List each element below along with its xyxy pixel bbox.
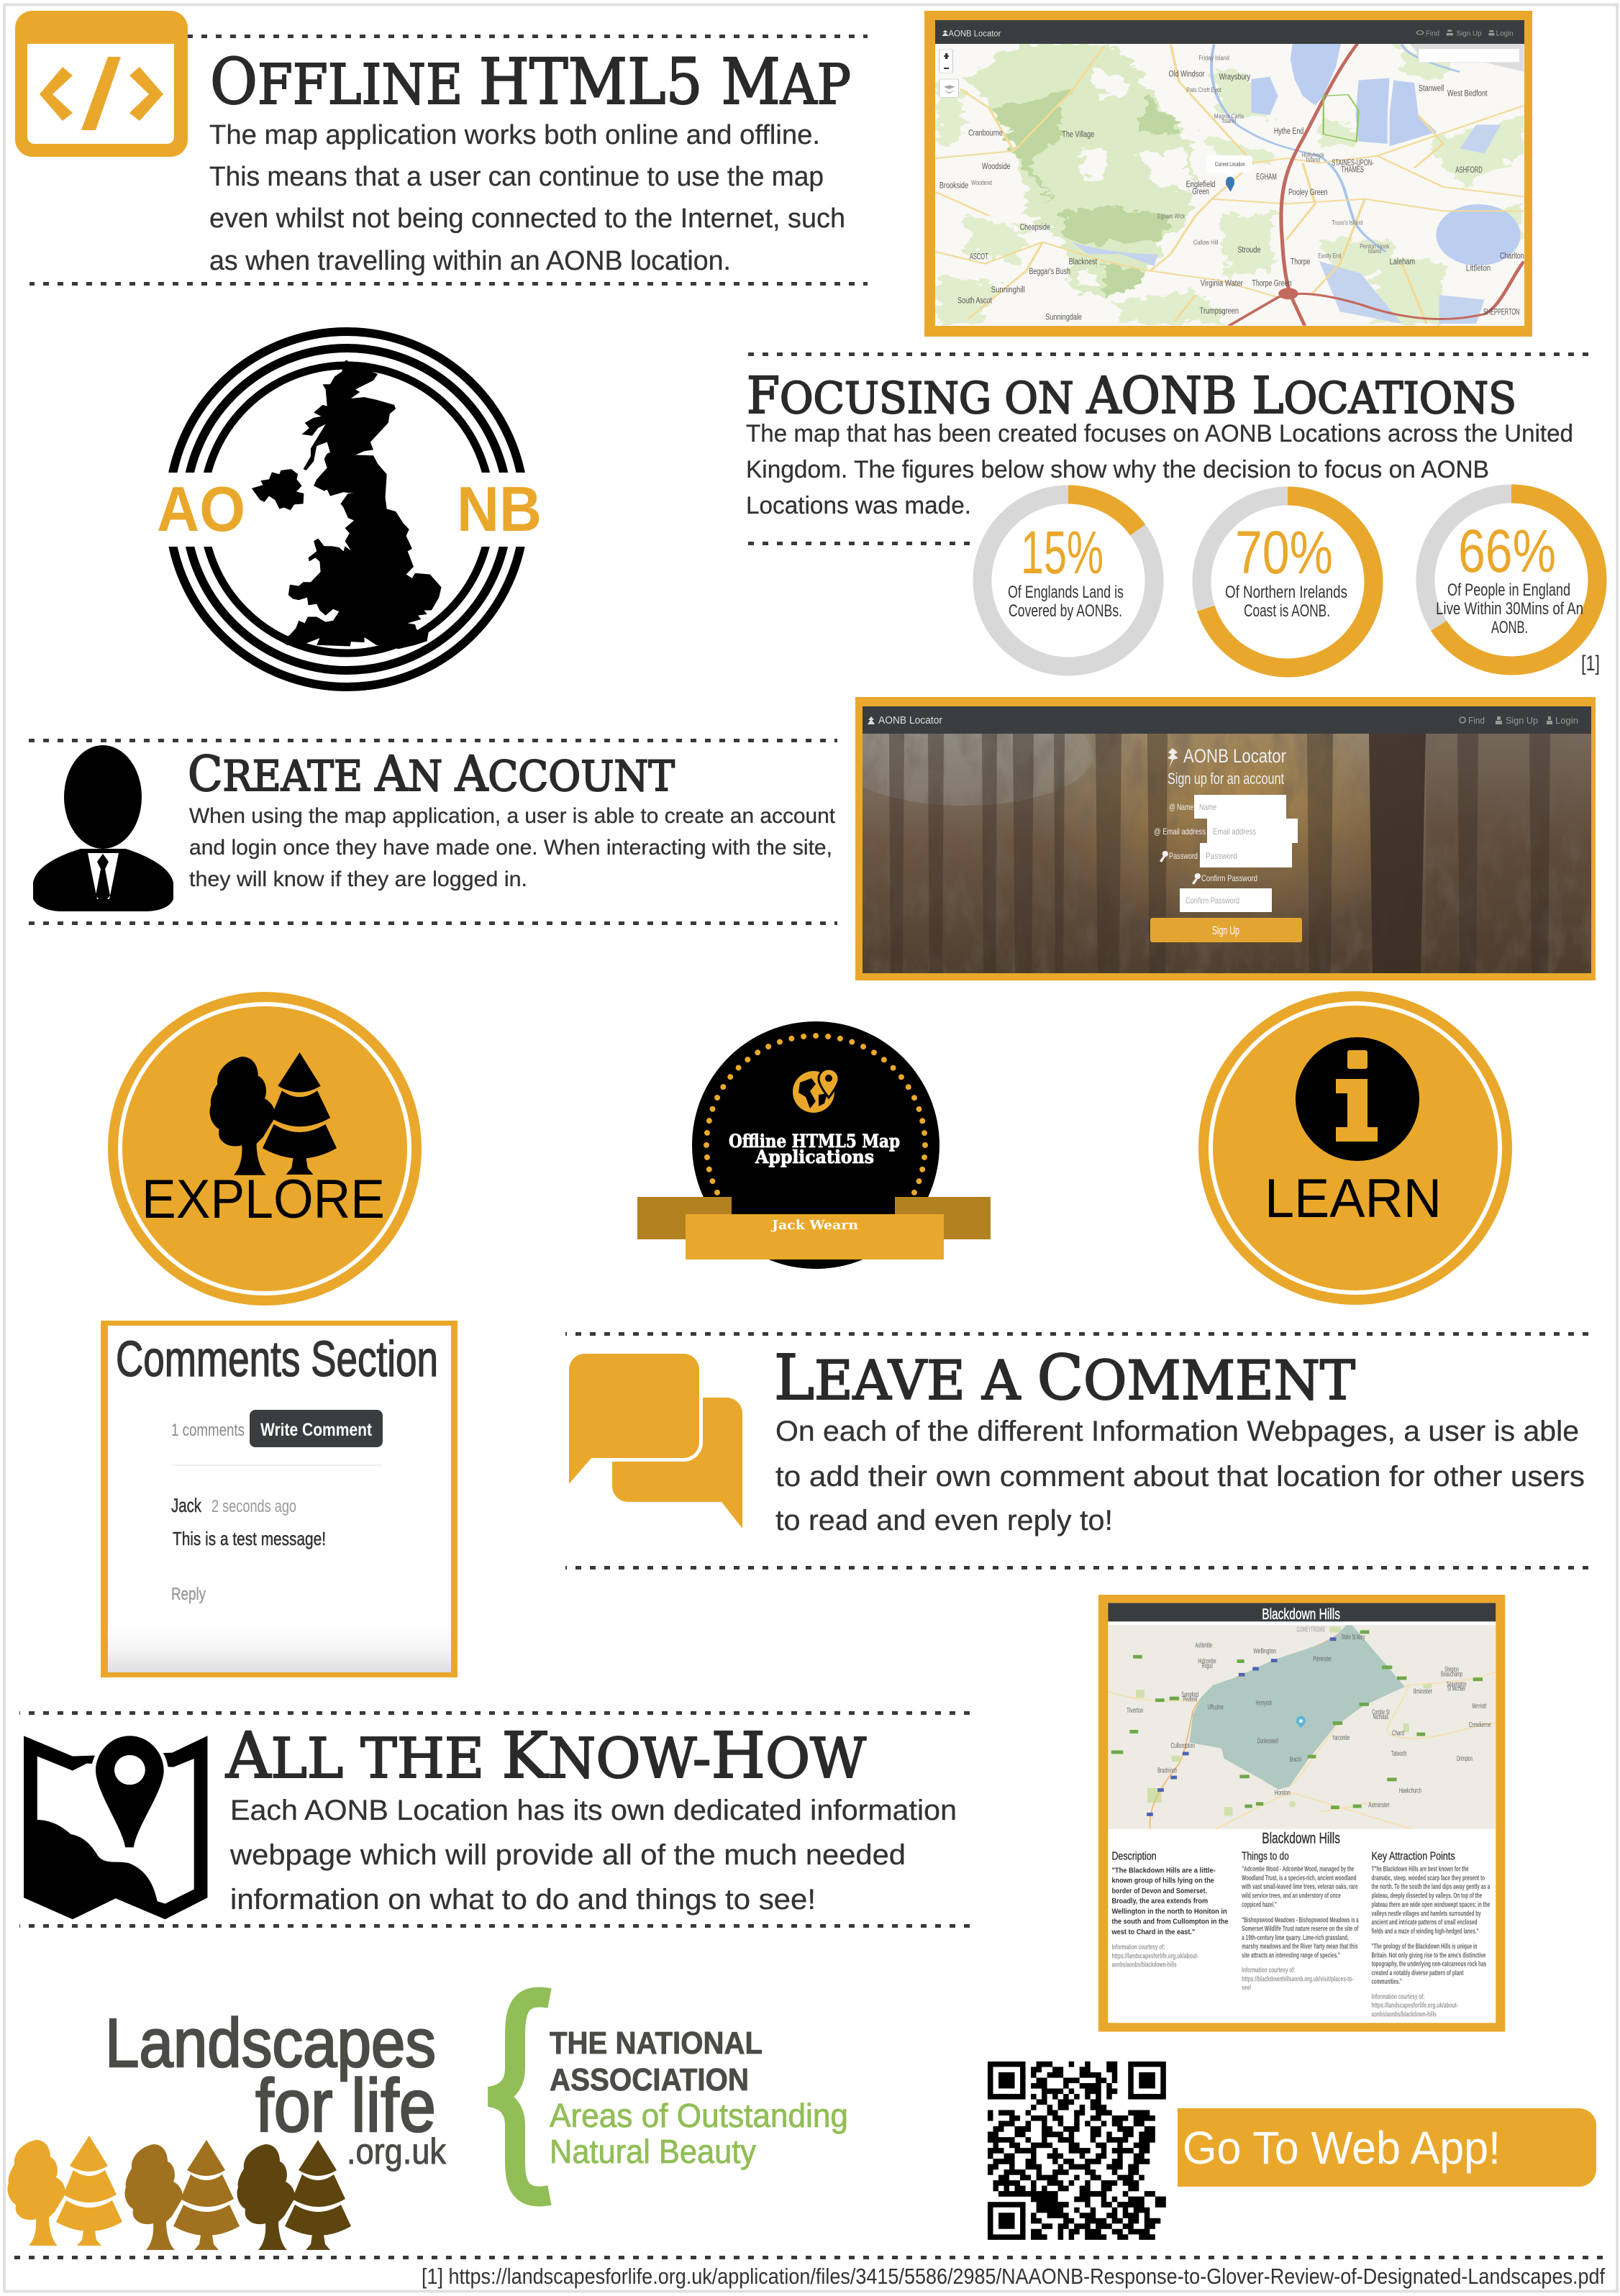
place names: Magna Carta [1214, 112, 1244, 119]
text: offline description: even whilst not being connected to the Internet, such [209, 204, 845, 234]
logo: National Association AONB: Natural Beauty [550, 2133, 756, 2170]
logo: National Association AONB: Areas of Outstanding [550, 2097, 848, 2134]
column: key attraction points: aonbs/aonbs/blackdown-hills [1371, 2010, 1437, 2018]
column: description: border of Devon and Somerset. [1111, 1887, 1207, 1895]
badge: Explore [108, 992, 422, 1306]
text: know-how description [229, 1795, 957, 1915]
map place names: Drimpton [1457, 1755, 1473, 1763]
navbar labels: Login [1496, 29, 1514, 37]
text: focus description: Kingdom. The figures below show why the decision to focus on AONB [746, 456, 1489, 483]
map place names: Bradninch [1157, 1767, 1177, 1775]
column: description: known group of hills lying on the [1111, 1877, 1214, 1885]
screenshot: comments section: Comments Section [116, 1331, 438, 1387]
text: comment description: to add their own comment about that location for other users [775, 1461, 1585, 1493]
icon: map with pin [24, 1736, 207, 1919]
column: key attraction points: Key Attraction Points [1371, 1851, 1455, 1863]
donut: 15% [983, 495, 1154, 666]
map place names: Ilminster [1414, 1688, 1433, 1696]
place names: Woodend [971, 178, 992, 186]
map place names: Hemyock [1256, 1700, 1272, 1708]
place names: West Bedfont [1447, 88, 1488, 98]
place names: Wraysbury [1219, 72, 1250, 81]
section: Focusing on AONB Locations [746, 352, 1600, 675]
column: description: aonbs/aonbs/blackdown-hills [1111, 1962, 1177, 1969]
map place names: Tiverton [1127, 1707, 1143, 1715]
logo: Landscapes for Life [7, 2005, 447, 2250]
column: key attraction points: Information courtesy of: [1371, 1993, 1424, 2001]
badge: Offline HTML5 Map Applications: Jack Wearn [770, 1218, 858, 1233]
badge: Offline HTML5 Map Applications [637, 1021, 991, 1269]
text: focus description [746, 420, 1573, 519]
infographic page: SHEPPERTON [1483, 307, 1519, 316]
text: offline description: This means that a user can continue to use the map [209, 162, 824, 192]
text: account description: When using the map application, a user is able to create an account [189, 804, 836, 828]
place names: Stroude [1237, 245, 1260, 255]
column: things to do: wild service trees, and an understory of once [1242, 1892, 1341, 1900]
location pin and popup [1207, 155, 1252, 192]
badge: Offline HTML5 Map Applications: Applications [755, 1147, 874, 1167]
place names: Trumpsgreen [1200, 306, 1239, 316]
sign up form: Email address [1213, 826, 1256, 837]
map place names: Rogus [1202, 1662, 1213, 1670]
heading: Offline HTML5 Map: OFFLINE HTML5 MAP [210, 45, 851, 119]
column: things to do: see/ [1242, 1984, 1251, 1992]
screenshot: comments section: Reply [171, 1585, 206, 1604]
section: Create An Account [26, 739, 837, 925]
search box [1419, 49, 1519, 63]
place names: Blacknest [1069, 257, 1097, 266]
donut: 70% [1201, 496, 1374, 668]
zoom controls [939, 49, 958, 97]
sign up form: Name [1199, 802, 1216, 812]
text: know-how description: webpage which will provide all of the much needed [229, 1839, 906, 1871]
ribbon front [686, 1214, 944, 1259]
navbar labels: AONB Locator [949, 29, 1001, 39]
place names: Island [1222, 117, 1236, 124]
donut: 66% [1426, 493, 1597, 666]
map place names: Seavington [1447, 1680, 1467, 1689]
place names: Island [1306, 155, 1320, 163]
place names: Virginia Water [1201, 278, 1243, 288]
text: offline description [209, 120, 845, 276]
place names: Stanwell [1419, 83, 1444, 93]
column: key attraction points: created a notably diverse pattern of plant [1371, 1969, 1464, 1977]
sign up form: Sign up for an account [1168, 770, 1284, 788]
column: things to do: site attracts an interesting range of species." [1242, 1951, 1340, 1959]
place names: ASCOT [970, 252, 988, 261]
map place names: Combe St [1372, 1709, 1390, 1717]
map place names: St Michael [1447, 1685, 1465, 1693]
icon: globe with pin [793, 1069, 839, 1113]
icon: speech bubbles [569, 1354, 742, 1529]
text: comment description: On each of the different Information Webpages, a user is able [775, 1416, 1579, 1447]
column: description: https://landscapesforlife.org.uk/about- [1111, 1952, 1198, 1961]
column: things to do: a 19th-century lime quarry. Lime-rich grassland, [1242, 1934, 1349, 1942]
place names [939, 54, 1524, 322]
navbar labels: Sign Up [1506, 715, 1538, 726]
map place names: Stoke St Mary [1342, 1634, 1365, 1641]
screenshot: Blackdown Hills information page: Blackdown Hills [1262, 1606, 1340, 1623]
place names: Egham Wick [1157, 212, 1186, 219]
text: focus description: The map that has been created focuses on AONB Locations across the United [746, 420, 1573, 447]
column: description: Information courtesy of: [1111, 1944, 1165, 1951]
place names: EGHAM [1256, 172, 1277, 181]
button: Go To Web App: Go To Web App! [1183, 2122, 1501, 2174]
place names: STAINES-UPON- [1332, 158, 1374, 168]
screenshot: comments section: 2 seconds ago [211, 1497, 296, 1516]
button: Go To Web App [1178, 2108, 1596, 2187]
donut: 66%: Live Within 30Mins of An [1436, 599, 1583, 619]
logo: Landscapes for Life: Landscapes [105, 2005, 436, 2082]
place names: The Village [1062, 129, 1094, 139]
place names: Island [1368, 247, 1381, 255]
sign up form: @ Email address [1154, 826, 1206, 837]
logo: National Association AONB [489, 1997, 848, 2197]
column: description: Wellington in the north to Honiton in [1111, 1908, 1227, 1915]
forest photo background [863, 734, 1591, 973]
column: key attraction points: ancient and intricate patterns of small enclosed [1371, 1918, 1478, 1927]
button: write comment: Write Comment [260, 1420, 373, 1440]
icon: row of trees [7, 2136, 351, 2250]
map place names: COMEYTROWE [1296, 1626, 1325, 1634]
sign up form: Confirm Password [1186, 896, 1239, 906]
donut: 15%: Covered by AONBs. [1009, 601, 1122, 621]
map place names: Chard [1392, 1730, 1404, 1738]
map place names: Yarcombe [1332, 1734, 1350, 1742]
place names: Thorpe Green [1252, 278, 1292, 288]
sign up form: Confirm Password [1201, 873, 1257, 883]
screenshot: comments section [101, 1321, 458, 1677]
logo: National Association AONB: ASSOCIATION [550, 2062, 749, 2097]
column: key attraction points [1371, 1851, 1491, 2018]
place names: Brookside [939, 181, 968, 190]
icon: trees [210, 1052, 337, 1175]
column: key attraction points: topography, the underlying non-calcareous rock has [1371, 1960, 1486, 1969]
text: offline description: The map application works both online and offline. [209, 120, 820, 150]
map place names: Holcombe [1198, 1658, 1216, 1666]
column: things to do: Information courtesy of: [1242, 1967, 1296, 1974]
logo: AONB UK map: NB [457, 473, 542, 545]
map place names: Dunkeswell [1257, 1738, 1278, 1746]
logo: Landscapes for Life: for life [255, 2064, 436, 2148]
column: key attraction points: dramatic, steep, wooded scarp face they present to [1371, 1874, 1485, 1882]
place names: Cheapside [1020, 222, 1050, 232]
screenshot: comments section: Jack [171, 1495, 201, 1516]
icon: person in suit [33, 745, 173, 911]
icon: green brace [489, 1997, 550, 2197]
map place names [1127, 1626, 1491, 1810]
logo: National Association AONB: THE NATIONAL [550, 2026, 763, 2061]
place names: Laleham [1390, 257, 1415, 266]
citation marker: [1] [1581, 652, 1600, 675]
sign up form: AONB Locator [1183, 745, 1286, 767]
heading: Create An Account: CREATE AN ACCOUNT [188, 746, 675, 802]
map place names: Merriott [1472, 1703, 1486, 1710]
map place names: Axminster [1368, 1802, 1390, 1810]
logo: AONB UK map: AO [157, 473, 245, 545]
map place names: Hawkchurch [1399, 1787, 1421, 1795]
map place names: Sampford [1181, 1691, 1198, 1699]
logo: Landscapes for Life: .org.uk [347, 2131, 447, 2172]
screenshot: map application: Charlton [1500, 251, 1524, 260]
place names: Pats Croft Eyot [1186, 86, 1221, 94]
column: things to do: "Adcombe Wood - Adcombe Wood, managed by the [1242, 1866, 1355, 1874]
column: description: west to Chard in the east." [1111, 1928, 1196, 1936]
donut: 15%: 15% [1021, 519, 1103, 586]
column: key attraction points: https://landscapesforlife.org.uk/about- [1371, 2002, 1458, 2010]
text: account description: and login once they have made one. When interacting with the site, [189, 836, 832, 860]
sign up form: @ Name [1169, 802, 1193, 812]
map place names: Peverell [1183, 1695, 1197, 1703]
place names: Friday Island [1198, 54, 1229, 61]
ribbon back [637, 1197, 991, 1239]
donut: 15%: Of Englands Land is [1008, 583, 1124, 602]
sign up form: Password [1169, 851, 1198, 861]
place names: Thorpe [1291, 257, 1310, 266]
footer reference [6, 2256, 1611, 2289]
column: key attraction points: Britain. Not only giving rise to the area's distinctive [1371, 1951, 1486, 1959]
text: account description [189, 804, 836, 891]
badge: Explore: EXPLORE [142, 1169, 385, 1230]
place names: Penton Hook [1360, 242, 1390, 250]
column: description: Broadly, the area extends from [1111, 1898, 1208, 1905]
column: description: "The Blackdown Hills are a little- [1111, 1867, 1216, 1874]
column: key attraction points: plateau there are wide open windswept spaces; in the [1371, 1901, 1491, 1909]
place names: Truss's Island [1332, 219, 1362, 226]
text: account description: they will know if they are logged in. [189, 867, 527, 891]
column: key attraction points: "The geology of the Blackdown Hills is unique in [1371, 1943, 1478, 1951]
place names: Pooley Green [1288, 187, 1327, 197]
map place names: Beacon [1290, 1756, 1301, 1764]
icon: code window [15, 11, 188, 157]
place names: Green [1192, 186, 1209, 196]
place names: Hollyhock [1301, 151, 1324, 158]
map place names: Tatworth [1391, 1750, 1407, 1758]
badge: Learn: LEARN [1265, 1168, 1442, 1229]
navbar labels: Find [1468, 715, 1485, 726]
screenshot: sign up page [855, 697, 1596, 980]
heading: Leave a Comment: LEAVE A COMMENT [774, 1342, 1355, 1414]
donut: 70%: Coast is AONB. [1244, 601, 1330, 621]
heading: Focusing on AONB Locations: FOCUSING ON AONB LOCATIONS [747, 366, 1516, 425]
map place names: Honiton [1275, 1789, 1291, 1798]
column: key attraction points: valleys nestle villages and hamlets surrounded by [1371, 1910, 1481, 1918]
column: things to do: marshy meadows and the River Yarty mean that this [1242, 1943, 1357, 1951]
column: things to do: Things to do [1242, 1851, 1289, 1863]
place names: Callow Hill [1193, 238, 1218, 246]
screenshot: comments section: 1 comments [171, 1421, 245, 1440]
donut: 66%: AONB. [1491, 618, 1528, 637]
screenshot: Blackdown Hills information page [1098, 1595, 1505, 2032]
navbar labels [868, 714, 1578, 726]
column: things to do: https://blackdownhillsaonb.org.uk/visit/places-to- [1242, 1975, 1354, 1983]
place names: Hythe End [1274, 126, 1303, 136]
text: know-how description: information on what to do and things to see! [230, 1884, 816, 1915]
page heading: Blackdown Hills [1262, 1830, 1340, 1847]
sign up form: Password [1206, 851, 1237, 861]
map place names: Shepton [1444, 1666, 1459, 1674]
text: offline description: as when travelling within an AONB location. [209, 246, 731, 276]
map drawing: Current Location [1215, 160, 1245, 168]
column: key attraction points: communities." [1371, 1978, 1402, 1986]
column: things to do: "Bishopswood Meadows - Bishopswood Meadows is a [1242, 1916, 1359, 1924]
screenshot: map application [924, 11, 1532, 337]
map drawing [935, 29, 1524, 326]
place names: Eastly End [1318, 252, 1341, 260]
column: things to do: Woodland Trust, is a species-rich, ancient woodland [1242, 1874, 1357, 1882]
column: description [1111, 1851, 1229, 1969]
button: write comment [250, 1410, 383, 1447]
text: focus description: Locations was made. [746, 492, 971, 519]
place names: Woodside [982, 161, 1011, 171]
badge: Learn [1198, 991, 1512, 1305]
donut: 70%: 70% [1235, 519, 1333, 586]
UK silhouette [252, 360, 442, 649]
column: key attraction points: T"he Blackdown Hills are best known for the [1371, 1866, 1469, 1874]
column: description: Description [1111, 1851, 1157, 1863]
navbar labels: AONB Locator [878, 714, 942, 726]
column: description: the south and from Cullompton in the [1111, 1918, 1229, 1926]
logo: AONB UK map [155, 332, 543, 687]
place names: Englefield [1186, 179, 1215, 189]
column: things to do: Somerset Wildlife Trust nature reserve on the site of [1242, 1925, 1359, 1933]
icon: information [1296, 1037, 1419, 1161]
place names: Beggar's Bush [1029, 266, 1070, 276]
section: Offline HTML5 Map [15, 11, 868, 286]
donut: 66%: 66% [1458, 517, 1556, 585]
column: key attraction points: plateau, deeply dissected by valleys. On top of the [1371, 1892, 1483, 1900]
map place names: Ashbrittle [1195, 1641, 1212, 1650]
place names: Cranbourne [968, 128, 1003, 137]
QR code [988, 2062, 1166, 2240]
place names: Littleton [1466, 263, 1491, 273]
column: things to do: with vast small-leaved lime trees, veteran oaks, rare [1241, 1883, 1358, 1891]
map place names: Beauchamp [1441, 1670, 1462, 1679]
navbar labels: Login [1555, 715, 1578, 726]
screenshot: comments section: This is a test message! [173, 1528, 326, 1549]
text: know-how description: Each AONB Location has its own dedicated information [230, 1795, 957, 1826]
map place names: Nicholas [1373, 1713, 1388, 1721]
sign up form: Sign Up [1212, 924, 1239, 937]
map of Blackdown Hills [1108, 1625, 1496, 1829]
place names: THAMES [1341, 165, 1364, 174]
map place names: Crewkerne [1469, 1721, 1491, 1729]
map place names: Cullompton [1170, 1742, 1195, 1750]
map place names: Wellington [1253, 1647, 1276, 1655]
column: key attraction points: the north. To the south the land dips away gently as a [1371, 1883, 1491, 1891]
section: Leave a Comment [565, 1332, 1591, 1570]
map place names: Pitminster [1313, 1655, 1332, 1663]
donut: 66%: Of People in England [1447, 580, 1570, 600]
place names: South Ascot [957, 296, 992, 305]
navbar labels [942, 29, 1514, 39]
column: key attraction points: fields and a maze of winding high-hedged lanes." [1371, 1928, 1479, 1936]
navbar labels: Find [1426, 29, 1439, 37]
column: things to do: coppiced hazel." [1242, 1901, 1277, 1909]
badge: Offline HTML5 Map Applications: Offline HTML5 Map [729, 1131, 900, 1152]
text: comment description: to read and even reply to! [775, 1505, 1113, 1536]
text: comment description [775, 1416, 1585, 1536]
place names: Old Windsor [1168, 69, 1205, 78]
donut: 70%: Of Northern Irelands [1225, 583, 1347, 602]
place names: Sunningdale [1045, 312, 1082, 322]
navbar labels: Sign Up [1457, 29, 1482, 37]
section: All the Know-How [19, 1711, 973, 1928]
place names: ASHFORD [1455, 165, 1483, 175]
sign up form [1150, 745, 1302, 942]
heading: All the Know-How: ALL THE KNOW-HOW [225, 1718, 866, 1792]
map place names: Uffculme [1208, 1704, 1224, 1712]
place names: Sunninghill [991, 285, 1025, 294]
column: things to do [1241, 1851, 1359, 1992]
